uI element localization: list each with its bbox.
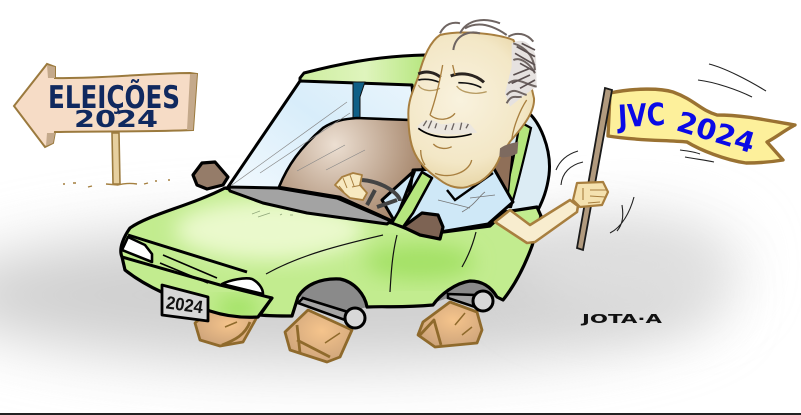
signpost: Eleições 2024	[14, 64, 197, 187]
hood scratches	[252, 211, 293, 217]
nose	[430, 65, 455, 119]
right side mirror	[403, 213, 443, 239]
eyes	[418, 79, 481, 88]
signpost: Eleições 2024: 2024	[74, 107, 158, 133]
rock wheels	[195, 302, 482, 362]
face	[408, 33, 534, 188]
license plate	[162, 285, 208, 321]
shirt	[382, 167, 513, 232]
right headlight	[222, 278, 263, 294]
shirt collar and wrinkles	[438, 173, 495, 212]
axles	[298, 291, 493, 328]
windshield reflections	[232, 102, 365, 185]
license plate: 2024	[165, 292, 204, 317]
wheel arch shadows	[298, 279, 497, 312]
driver's hand	[335, 173, 367, 200]
chin lines	[421, 100, 527, 175]
flag: JVC 2024	[608, 89, 795, 163]
hair	[440, 20, 537, 107]
signature: JOTA·A	[580, 312, 663, 326]
steering wheel	[362, 180, 400, 207]
sign text: ELEIÇÕES	[48, 79, 180, 116]
car body	[121, 188, 541, 318]
left side mirror	[193, 162, 228, 189]
driver's head	[408, 20, 537, 188]
green A pillar	[392, 172, 432, 227]
car front details	[122, 235, 272, 298]
left headlight	[122, 237, 152, 262]
flag pole	[577, 88, 612, 250]
fist holding pole	[573, 182, 608, 207]
mouth	[418, 128, 472, 137]
flag: JVC 2024: JVC	[616, 97, 666, 135]
motion lines	[556, 64, 766, 233]
eyebrows	[418, 72, 484, 82]
car roof	[300, 55, 430, 88]
flag: JVC 2024: 2024	[673, 105, 759, 160]
moustache	[417, 120, 477, 135]
eye bags	[418, 85, 487, 93]
seat back	[279, 118, 425, 222]
dark blue roof post	[353, 82, 365, 118]
windshield base	[228, 187, 391, 224]
windshield	[228, 81, 420, 222]
neck hair	[499, 142, 518, 157]
car rear window and pillar	[492, 110, 549, 213]
driver's arm	[495, 200, 578, 243]
body creases	[266, 232, 476, 292]
